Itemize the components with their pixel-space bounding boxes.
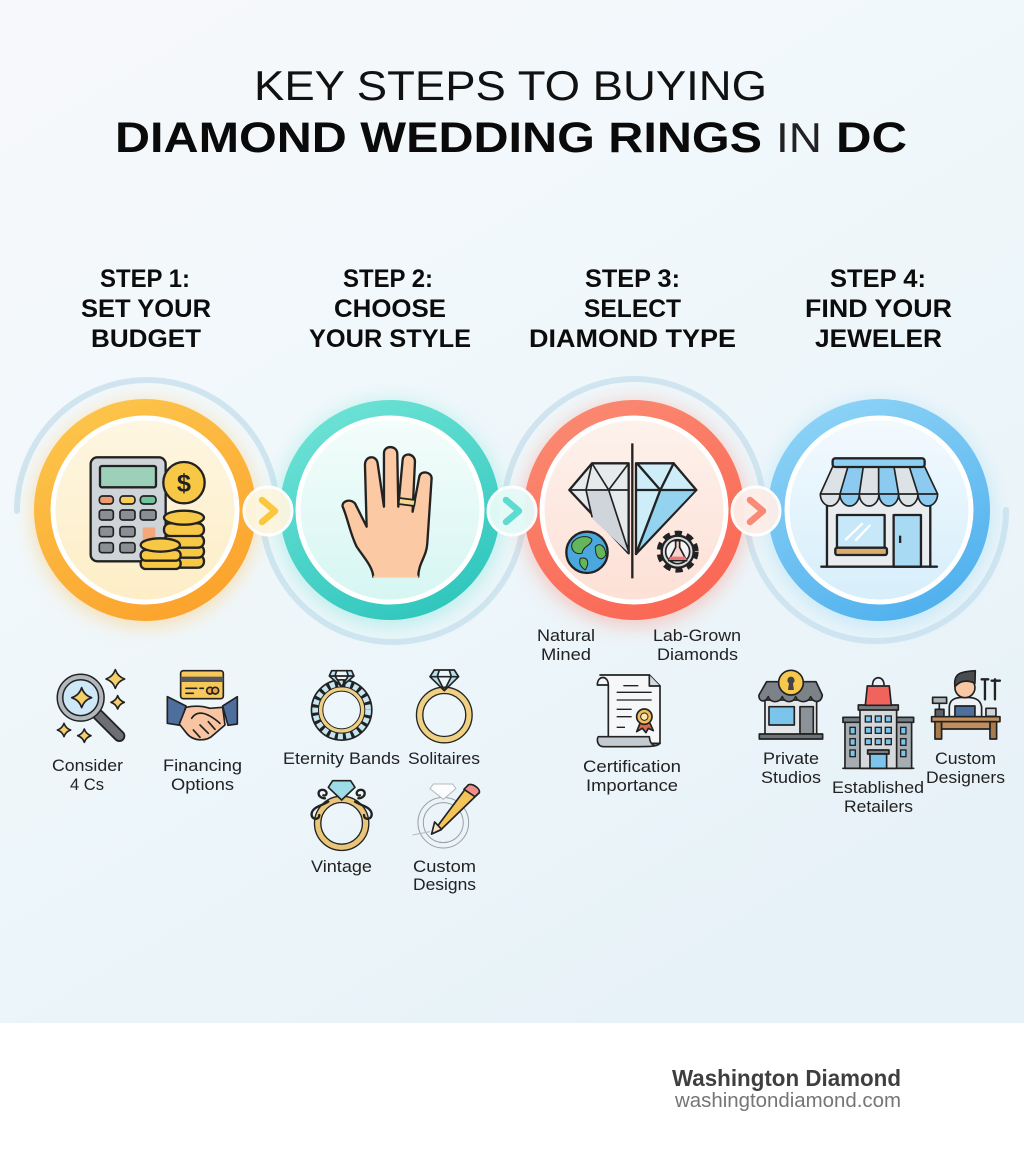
item: certification importance: Importance: [586, 776, 678, 795]
heading: step 3: SELECT: [584, 295, 681, 323]
item: consider 4 Cs: Consider: [52, 756, 123, 775]
step 1 circle: [33, 399, 257, 626]
item: certification importance: [583, 675, 681, 795]
icon: calculator and coins: [91, 457, 205, 569]
heading: step 2: CHOOSE: [334, 295, 446, 323]
icon: natural and lab diamonds: [566, 443, 696, 578]
item: custom designers: Designers: [926, 768, 1005, 787]
heading: step 2: YOUR STYLE: [309, 325, 471, 353]
footer brand: Washington Diamond: [672, 1065, 901, 1091]
icon: lab gear: [660, 534, 695, 569]
step 3 circle: [522, 400, 746, 626]
heading: step 4: STEP 4:: [830, 265, 926, 293]
title: [115, 62, 907, 162]
label: lab-grown diamonds: Lab-Grown: [653, 626, 741, 645]
item: certification importance: Certification: [583, 757, 681, 776]
step 2 details: [283, 670, 480, 894]
footer brand: [672, 1065, 901, 1112]
item: private studios: Studios: [761, 768, 821, 787]
heading: step 4: JEWELER: [815, 325, 942, 353]
item: established retailers: [832, 678, 924, 816]
item: solitaires: [408, 670, 480, 768]
item: consider 4 Cs: [52, 670, 125, 794]
item: custom designers: [926, 671, 1005, 787]
heading: step 2: STEP 2:: [343, 265, 433, 293]
step headings: [81, 265, 952, 353]
arrow: step 2 to 3: [488, 487, 536, 535]
item: financing options: Options: [171, 775, 234, 794]
heading: step 1: BUDGET: [91, 325, 201, 353]
heading: step 1: SET YOUR: [81, 295, 211, 323]
title: DIAMOND WEDDING RINGS: [115, 114, 762, 162]
item: eternity bands: [283, 671, 400, 768]
label: natural mined: Natural: [537, 626, 595, 645]
item: custom designs: Custom: [413, 857, 476, 876]
footer brand: washingtondiamond.com: [674, 1090, 901, 1112]
item: financing options: [163, 671, 242, 794]
heading: step 1: [81, 265, 211, 353]
heading: step 2: [309, 265, 471, 353]
item: consider 4 Cs: 4 Cs: [70, 775, 104, 794]
icon: globe: [566, 532, 608, 573]
icon: storefront: [820, 458, 938, 567]
heading: step 4: [805, 265, 952, 353]
item: private studios: Private: [763, 749, 819, 768]
item: financing options: Financing: [163, 756, 242, 775]
item: custom designers: Custom: [935, 749, 996, 768]
item: vintage: [311, 781, 372, 876]
heading: step 3: DIAMOND TYPE: [529, 325, 736, 353]
item: established retailers: Retailers: [844, 797, 913, 816]
label: natural mined: Mined: [541, 645, 591, 664]
item: custom designs: Designs: [413, 875, 476, 894]
connecting arcs: [17, 379, 1006, 642]
label: lab-grown diamonds: Diamonds: [657, 645, 738, 664]
title: KEY STEPS TO BUYING: [254, 62, 767, 109]
step 4 details: [759, 670, 1005, 816]
icon: calculator and coins: $: [177, 470, 191, 498]
title: IN: [776, 114, 822, 161]
heading: step 1: STEP 1:: [100, 265, 190, 293]
heading: step 4: FIND YOUR: [805, 295, 952, 323]
item: vintage: Vintage: [311, 857, 372, 876]
arrow: step 3 to 4: [732, 487, 780, 535]
heading: step 3: STEP 3:: [585, 265, 680, 293]
step 1 details: [52, 670, 242, 794]
heading: step 3: [529, 265, 736, 353]
title: DC: [836, 114, 907, 162]
item: eternity bands: Eternity Bands: [283, 749, 400, 768]
icon: hand with ring: [343, 447, 432, 577]
label: lab-grown diamonds: [653, 626, 741, 664]
item: custom designs: [413, 784, 479, 894]
item: established retailers: Established: [832, 778, 924, 797]
step 2 circle: [278, 400, 502, 626]
item: private studios: [759, 670, 823, 787]
label: natural mined: [537, 626, 595, 664]
step 4 circle: [767, 399, 991, 626]
step 3 details: [537, 626, 741, 795]
arrow: step 1 to 2: [244, 487, 292, 535]
item: solitaires: Solitaires: [408, 749, 480, 768]
